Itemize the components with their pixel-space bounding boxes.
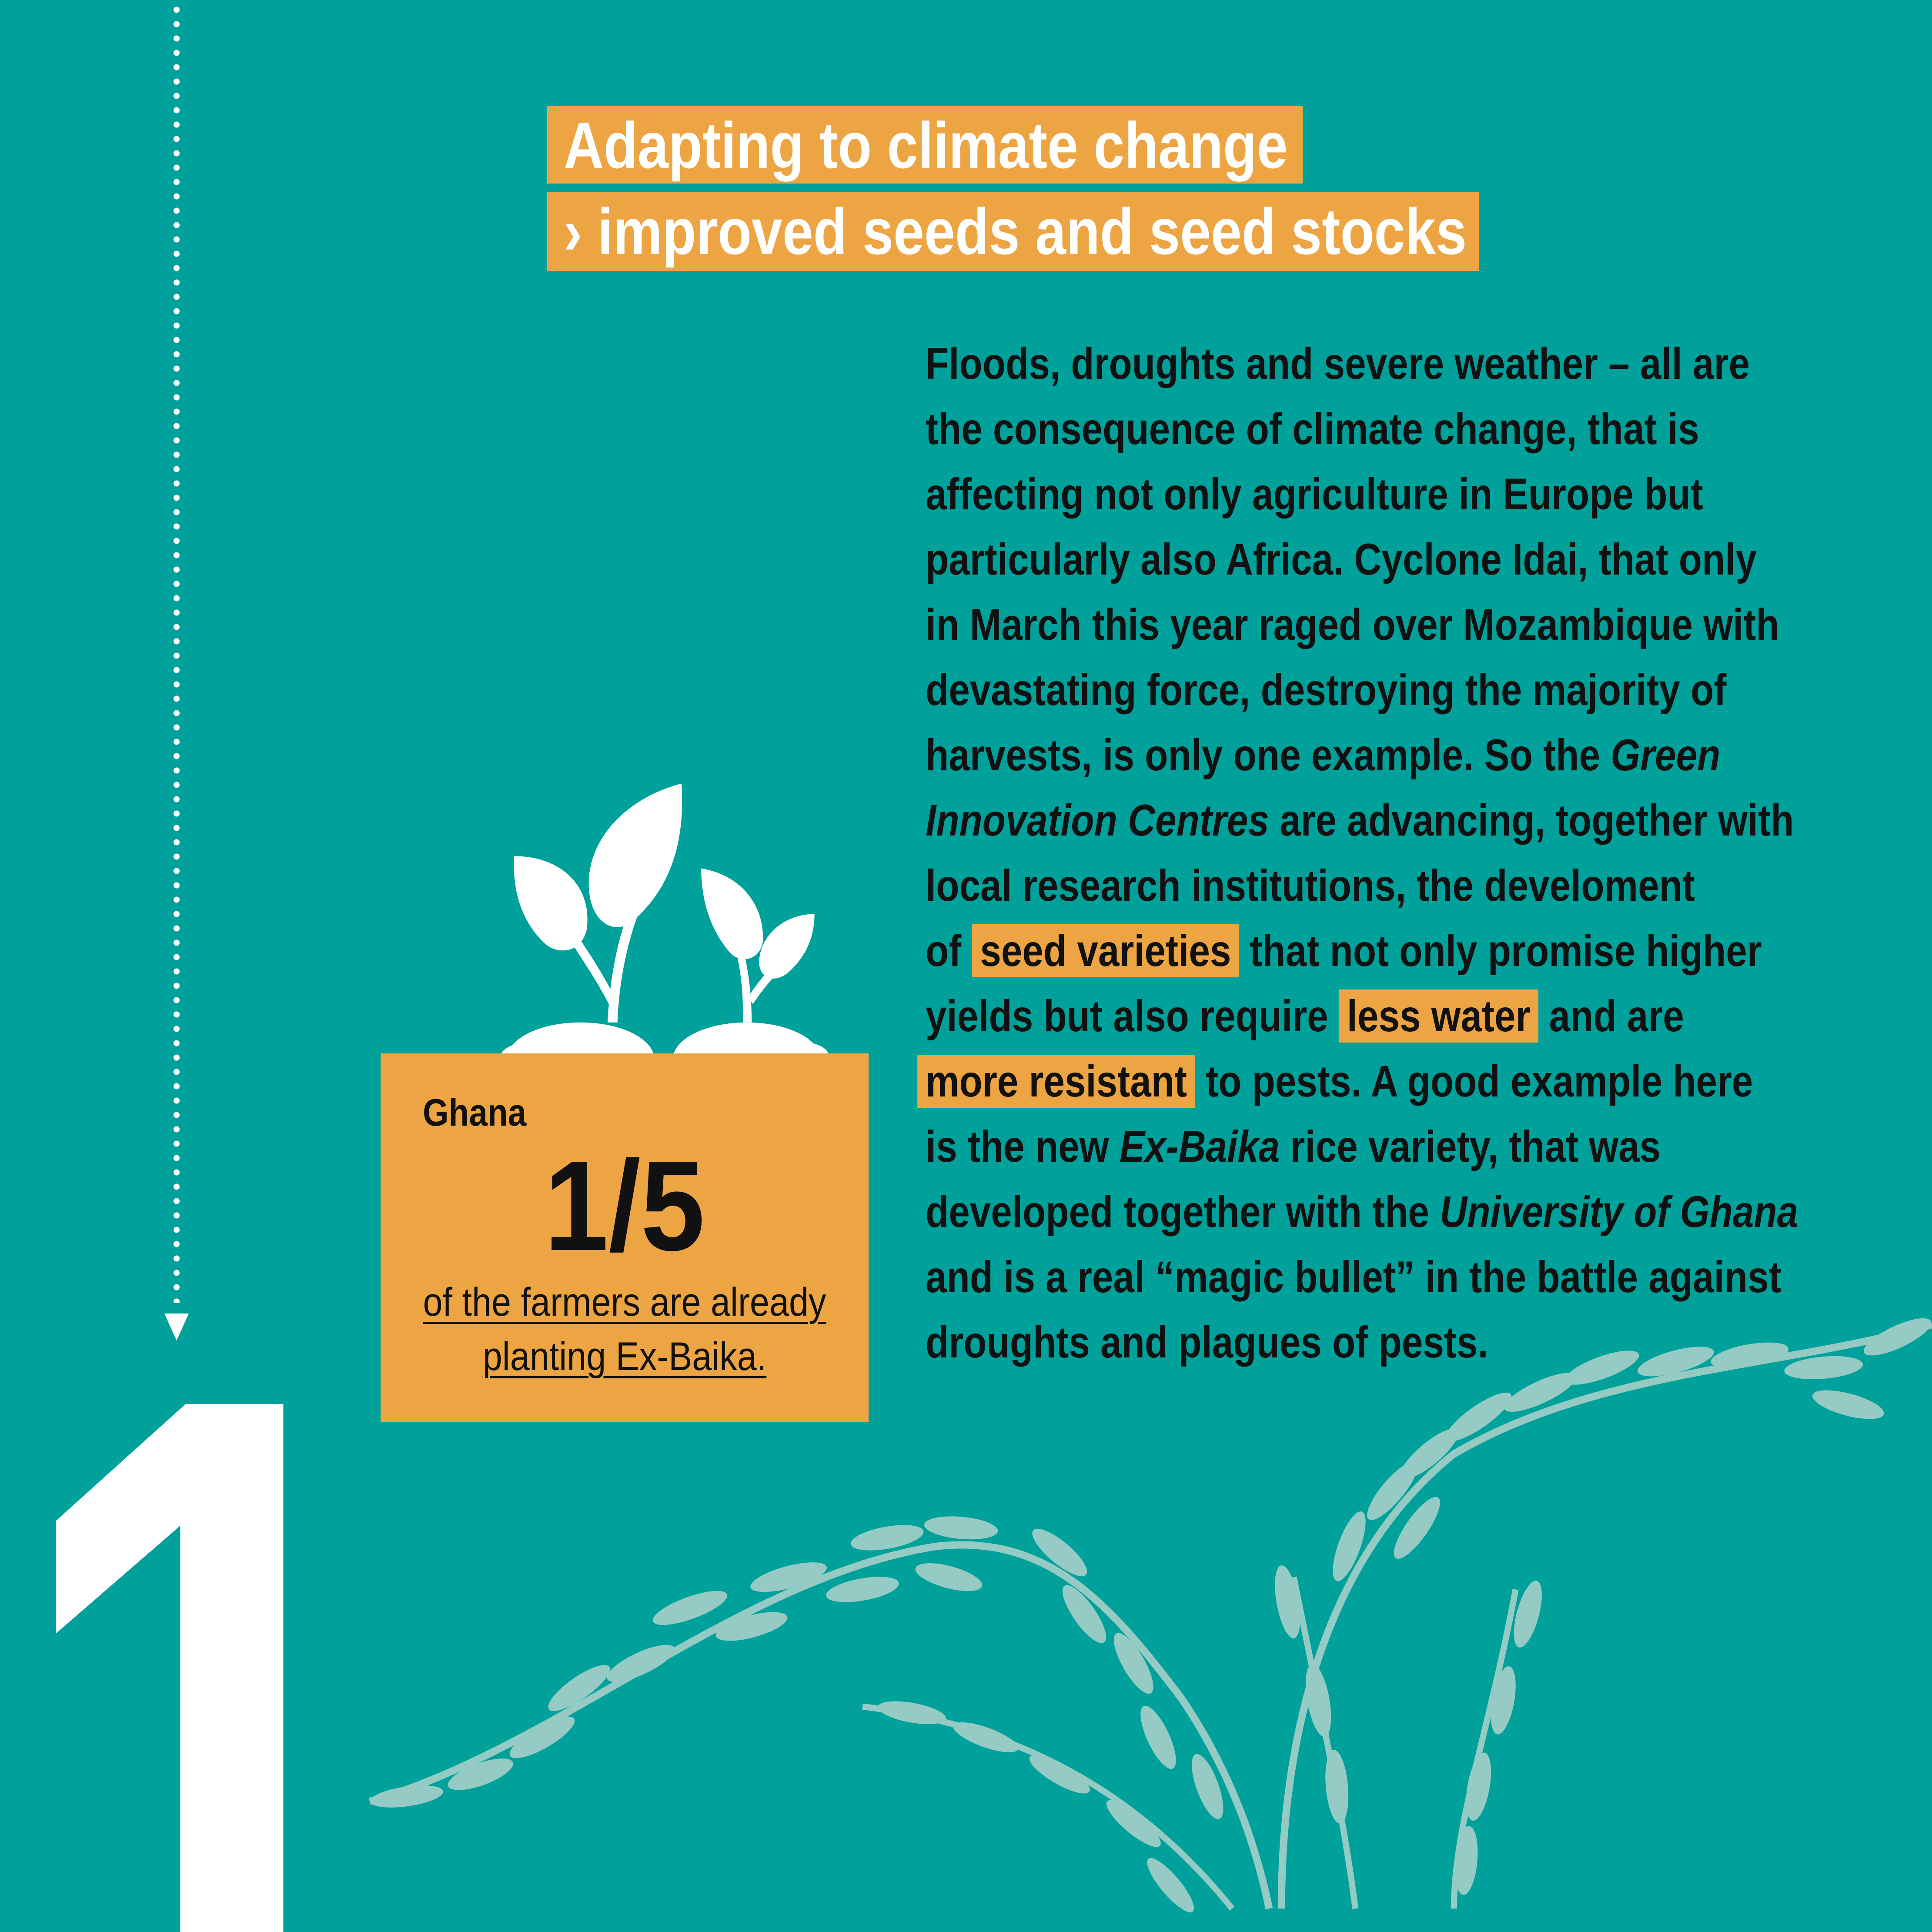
- body text: more resistant to pests. A good example here: [926, 1056, 1753, 1106]
- big number 1/5: 1/5: [544, 1134, 705, 1277]
- body text: Innovation Centres are advancing, together with: [926, 796, 1794, 845]
- icon: seedlings: [500, 779, 831, 1057]
- body text: [926, 331, 1798, 1375]
- caption: planting Ex-Baika.: [483, 1334, 766, 1379]
- body text: is the new Ex-Baika rice variety, that was: [926, 1122, 1661, 1171]
- title line 1: Adapting to climate change: [564, 109, 1288, 182]
- label: Ghana: Ghana: [423, 1091, 526, 1134]
- body text: and is a real “magic bullet” in the battle against: [926, 1252, 1782, 1302]
- body text: yields but also require less water and are: [926, 991, 1684, 1041]
- body text: devastating force, destroying the majority of: [926, 665, 1726, 715]
- body text: of seed varieties that not only promise higher: [926, 926, 1762, 976]
- body text: the consequence of climate change, that is: [926, 404, 1699, 454]
- caption: [410, 1275, 839, 1384]
- body text: particularly also Africa. Cyclone Idai, that only: [926, 535, 1757, 584]
- body text: local research institutions, the develoment: [926, 861, 1695, 910]
- body text: developed together with the University of Ghana: [926, 1187, 1798, 1237]
- body text: droughts and plagues of pests.: [926, 1317, 1488, 1367]
- body text: Floods, droughts and severe weather – all are: [926, 339, 1750, 388]
- title line 2: › improved seeds and seed stocks: [564, 195, 1467, 268]
- body text: harvests, is only one example. So the Green: [926, 730, 1720, 780]
- body text: affecting not only agriculture in Europe but: [926, 469, 1703, 519]
- dotted vertical line with arrow: [170, 0, 183, 1342]
- body text: in March this year raged over Mozambique with: [926, 600, 1779, 649]
- stat box: Ghana 1/5: [381, 1053, 869, 1422]
- caption: of the farmers are already: [423, 1280, 826, 1324]
